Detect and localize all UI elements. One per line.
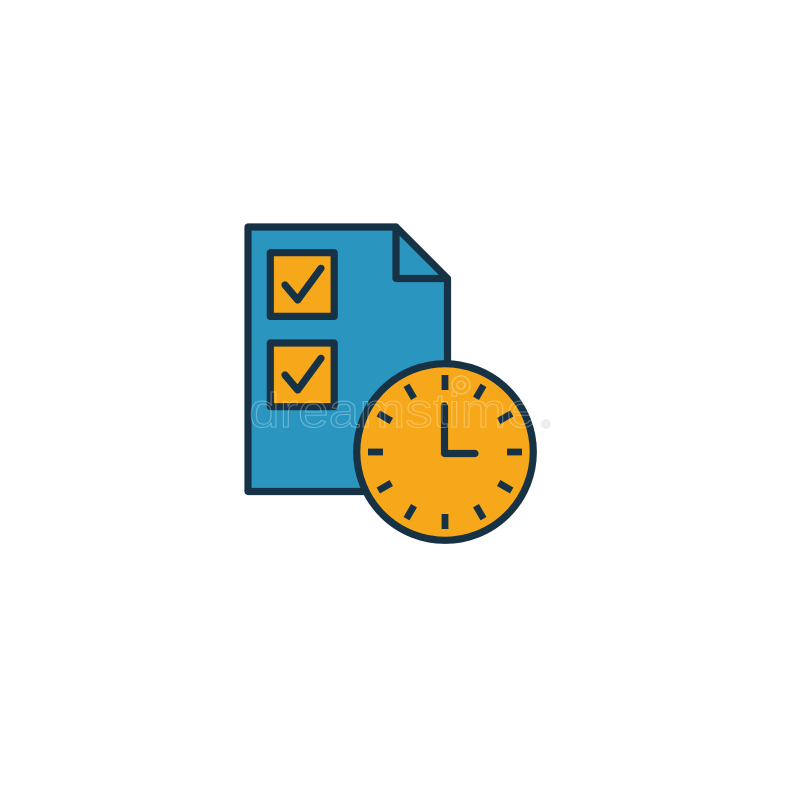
document page <box>248 227 448 492</box>
checkbox 2 <box>270 343 334 407</box>
clock hands <box>444 406 475 454</box>
watermark: dreamstime <box>249 385 537 438</box>
clock face <box>357 364 533 540</box>
checkbox 1 <box>270 253 334 316</box>
clock <box>357 364 533 540</box>
clock hour ticks <box>368 375 522 529</box>
